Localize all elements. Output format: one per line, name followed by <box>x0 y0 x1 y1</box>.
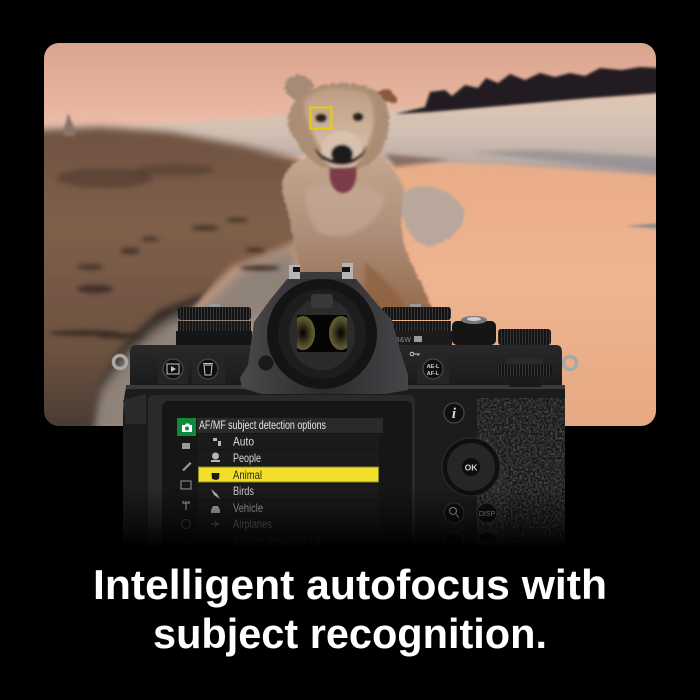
bottom fade <box>100 488 600 556</box>
tail <box>398 186 464 247</box>
sky <box>44 43 656 167</box>
body <box>282 150 432 315</box>
dog shading <box>305 88 410 315</box>
playback button <box>158 355 188 384</box>
sea <box>44 94 656 178</box>
viewfinder window <box>297 315 347 352</box>
camera tab <box>177 418 196 436</box>
eyecup notch <box>311 294 333 308</box>
blurred post <box>64 113 76 136</box>
head ruff <box>288 83 389 172</box>
menu rows: Birds <box>233 484 254 498</box>
menu rows: Vehicle <box>233 501 263 515</box>
wet shoreline reflection <box>90 242 301 426</box>
menu rows: People <box>233 451 261 465</box>
left dial <box>176 304 252 346</box>
panel: beach photo with dog <box>44 43 656 426</box>
dog face <box>315 113 366 193</box>
lower buttons <box>444 532 497 552</box>
left hinge <box>123 394 146 424</box>
top plate <box>130 345 562 388</box>
headline: subject recognition. <box>153 610 547 657</box>
tide streak <box>627 222 656 230</box>
strap lug left <box>114 356 126 368</box>
leg shadow <box>364 263 405 309</box>
rear dial <box>497 358 552 387</box>
menu title bar <box>197 418 383 433</box>
leather grip <box>477 398 565 553</box>
selected row: Animal <box>198 467 378 482</box>
tongue <box>330 167 356 193</box>
muzzle <box>321 131 363 169</box>
menu title: AF/MF subject detection options <box>199 420 326 432</box>
small dial <box>498 329 551 345</box>
OK multi-selector: OK <box>465 462 478 472</box>
dark shore strip <box>385 154 450 167</box>
headline <box>93 561 607 657</box>
eyecup inner ring <box>278 289 366 379</box>
left ear <box>284 75 314 102</box>
infographic canvas <box>44 43 656 656</box>
right ear <box>378 89 397 103</box>
headline: Intelligent autofocus with <box>93 561 607 608</box>
menu rows: Airplanes <box>233 517 272 531</box>
right dial: B&W <box>395 337 411 344</box>
right dial <box>382 304 452 346</box>
eyecup <box>267 279 377 389</box>
info button <box>444 403 464 423</box>
left sand <box>44 122 303 426</box>
eyes <box>316 114 326 122</box>
delete button <box>192 355 225 384</box>
ledge highlight <box>126 385 565 389</box>
mouth <box>315 146 366 165</box>
nose <box>331 144 353 164</box>
menu rows <box>198 434 379 548</box>
rear screen <box>162 401 412 553</box>
AE-L button <box>417 354 449 384</box>
foam <box>479 148 656 172</box>
eyepiece bezel <box>289 298 355 370</box>
hot shoe <box>289 263 353 280</box>
menu rows: Subject detection off <box>233 534 321 548</box>
AE-L button: AF-L <box>427 371 440 377</box>
viewfinder housing <box>240 279 408 394</box>
release knob <box>452 316 496 345</box>
menu rows: Auto <box>233 434 254 448</box>
dog silhouette <box>282 75 464 315</box>
head fill <box>305 88 374 148</box>
DISP button <box>477 503 497 523</box>
focus box <box>310 108 332 128</box>
info button: i <box>452 406 457 422</box>
menu tabs <box>177 418 196 544</box>
DISP button: DISP <box>479 511 495 518</box>
strap lug right <box>564 356 576 370</box>
camera <box>114 263 576 553</box>
lower body <box>123 388 565 553</box>
wet sand right <box>180 159 656 426</box>
eye sensor <box>258 355 274 371</box>
footprints <box>49 164 280 339</box>
OK multi-selector <box>442 438 500 496</box>
chest highlight <box>305 183 385 236</box>
distant breakwater <box>395 67 700 114</box>
key icon <box>410 352 420 356</box>
menu rows: Animal <box>233 468 262 482</box>
rear screen bezel <box>148 395 415 553</box>
zoom button <box>444 503 464 523</box>
AE-L button: AE-L <box>427 364 440 370</box>
lower buttons: MENU <box>478 541 496 547</box>
